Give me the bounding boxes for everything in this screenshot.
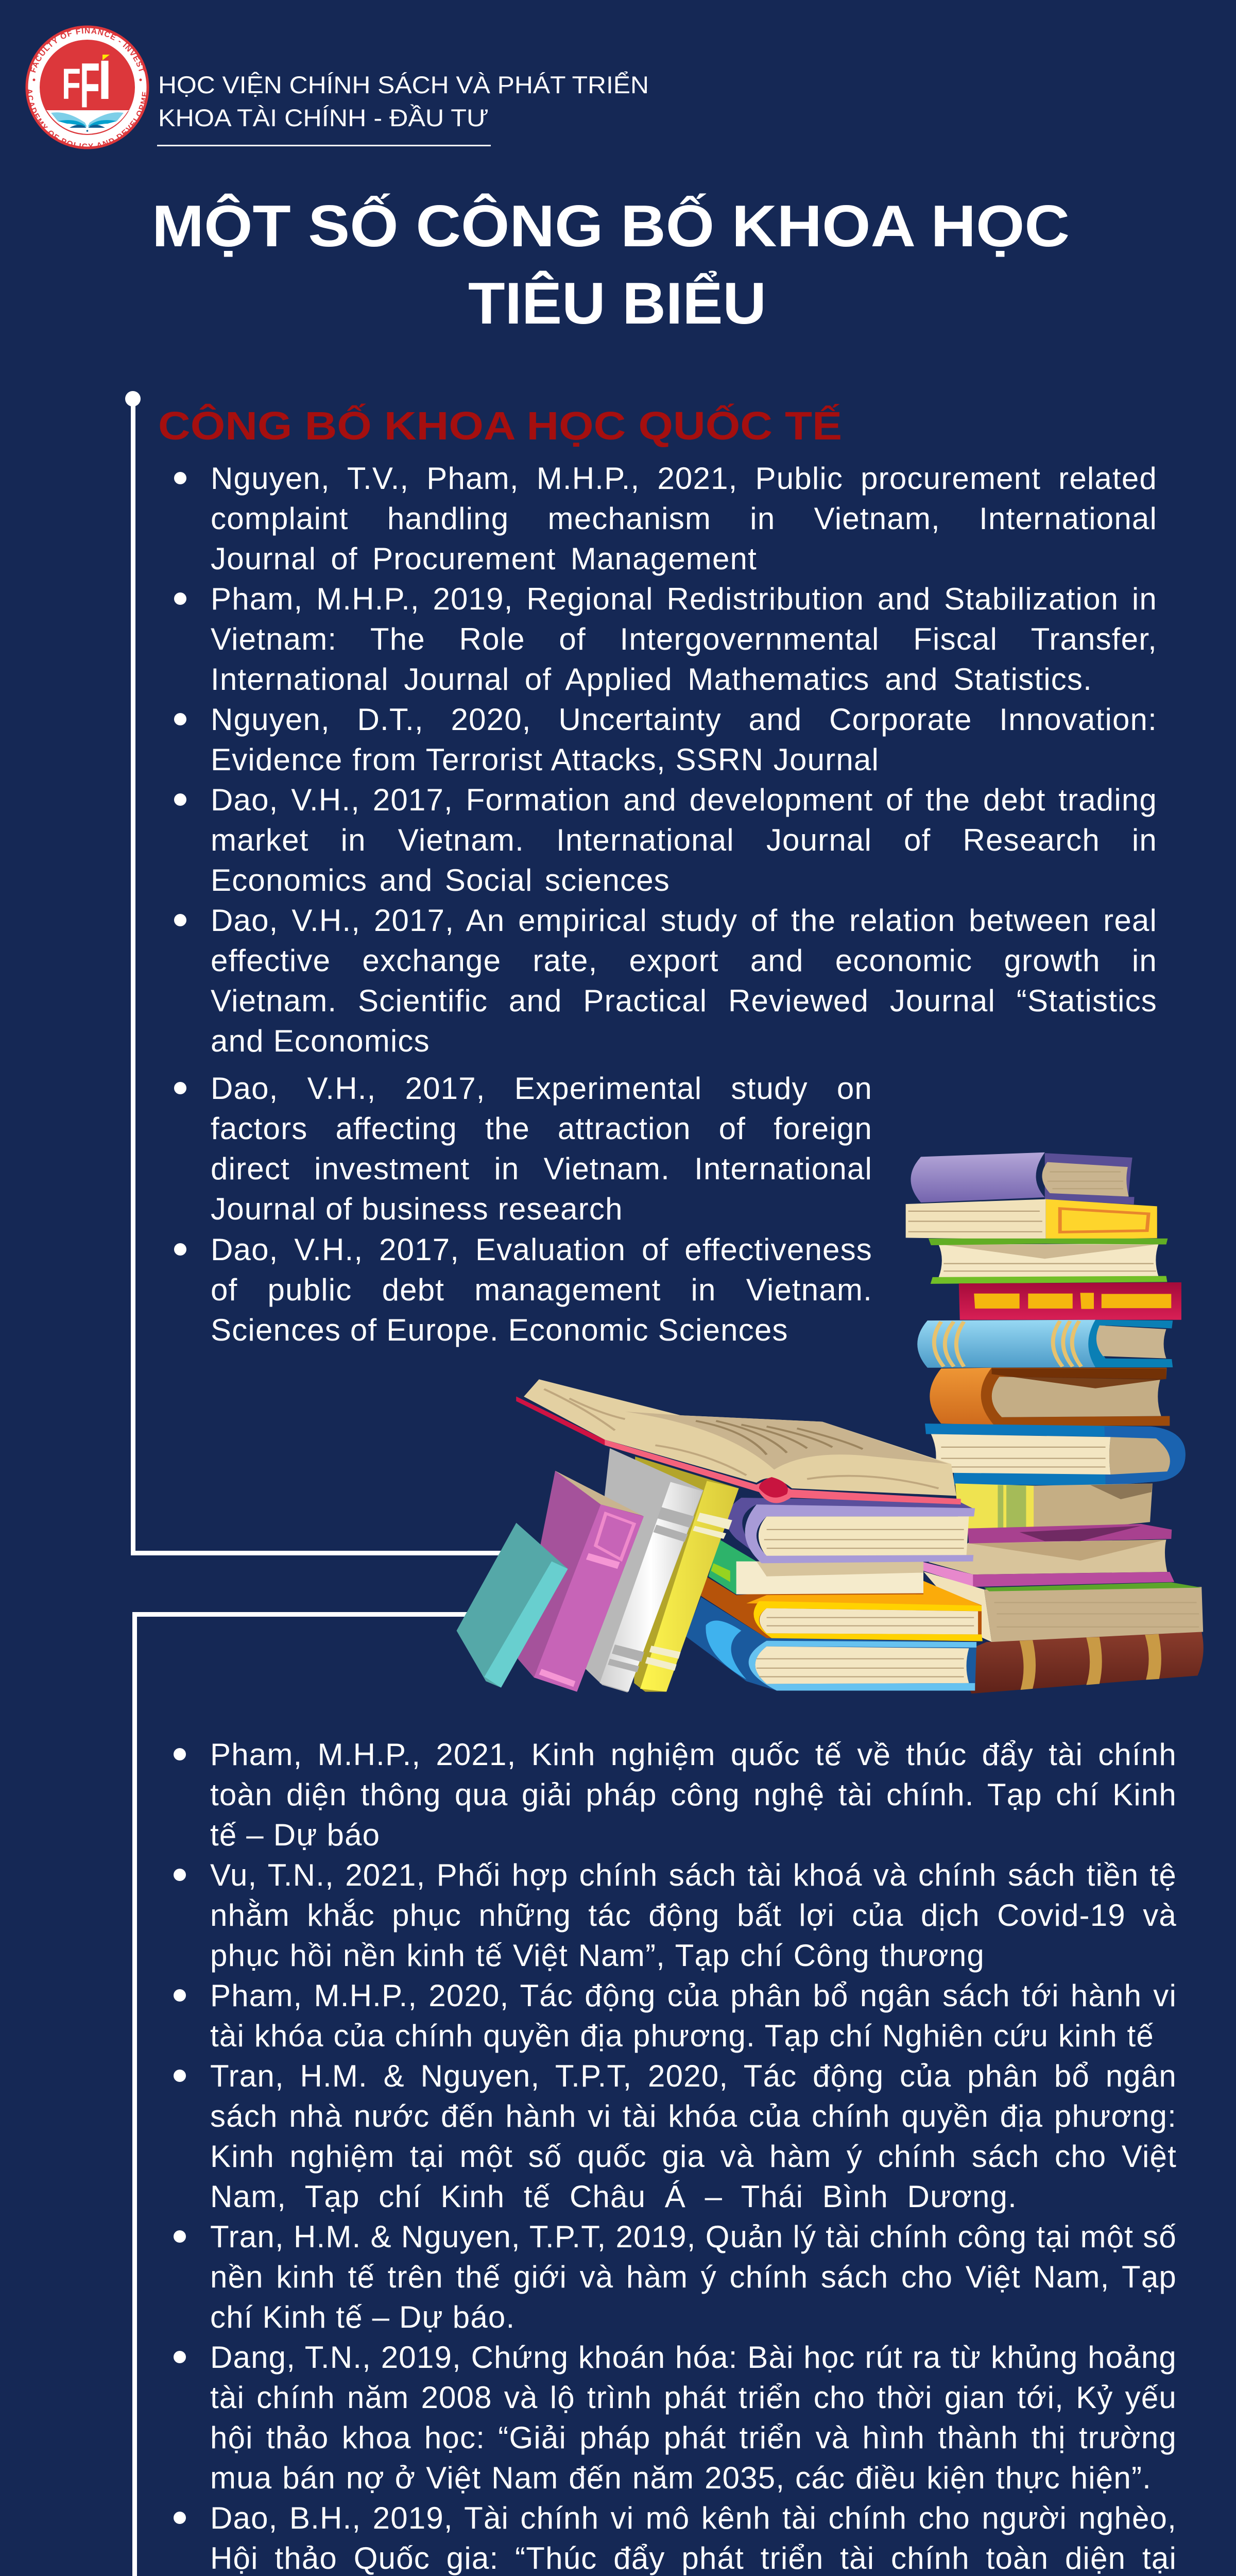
book: orange bbox=[930, 1368, 1170, 1426]
book: green cover bbox=[929, 1239, 1168, 1284]
list: international publications bbox=[174, 461, 1157, 1347]
item: phục hồi nền kinh tế Việt Nam”, Tạp chí Công thương bbox=[210, 1938, 985, 1973]
item bbox=[174, 1858, 1177, 1973]
item: Pham, M.H.P., 2020, Tác động của phân bổ ngân sách tới hành vi bbox=[210, 1978, 1177, 2013]
item bbox=[174, 702, 1157, 777]
item bbox=[174, 2340, 1177, 2495]
item: tài khóa của chính quyền địa phương. Tạp chí Nghiên cứu kinh tế bbox=[210, 2019, 1154, 2053]
item: International Journal of Applied Mathematics and Statistics. bbox=[211, 662, 1092, 697]
item: Nguyen, T.V., Pham, M.H.P., 2021, Public procurement related bbox=[211, 461, 1157, 496]
header: institute name: HỌC VIỆN CHÍNH SÁCH VÀ PHÁT TRIỂN bbox=[158, 71, 649, 98]
item: and Economics bbox=[211, 1024, 430, 1058]
item bbox=[174, 1232, 872, 1347]
item: Journal of Procurement Management bbox=[211, 541, 757, 576]
book: magenta bbox=[923, 1524, 1174, 1587]
item: Nguyen, D.T., 2020, Uncertainty and Corporate Innovation: bbox=[211, 702, 1157, 737]
item: complaint handling mechanism in Vietnam, International bbox=[211, 501, 1157, 536]
title: MỘT SỐ CÔNG BỐ KHOA HỌC bbox=[152, 194, 1070, 259]
book: purple top bbox=[911, 1153, 1135, 1205]
item: factors affecting the attraction of foreign bbox=[211, 1111, 872, 1146]
item: Evidence from Terrorist Attacks, SSRN Journal bbox=[211, 742, 879, 777]
item bbox=[174, 1737, 1177, 1852]
book: cream and yellow bbox=[906, 1199, 1157, 1240]
item bbox=[174, 1071, 872, 1226]
logo: FFI round seal: F bbox=[80, 49, 100, 121]
item: tài chính năm 2008 và lộ trình phát triển cho thời gian tới, Kỷ yếu bbox=[210, 2380, 1177, 2415]
item: Tran, H.M. & Nguyen, T.P.T, 2019, Quản lý tài chính công tại một số bbox=[210, 2219, 1177, 2254]
item: effective exchange rate, export and economic growth in bbox=[211, 943, 1157, 978]
item bbox=[174, 461, 1157, 576]
title: TIÊU BIỂU bbox=[468, 271, 766, 336]
item: hội thảo khoa học: “Giải pháp phát triển và hình thành thị trường bbox=[210, 2420, 1177, 2455]
book: sky blue bbox=[917, 1320, 1173, 1368]
item: Kinh nghiệm tại một số quốc gia và hàm ý chính sách cho Việt bbox=[210, 2139, 1177, 2174]
header: institute name bbox=[157, 71, 649, 146]
item: Dao, B.H., 2019, Tài chính vi mô kênh tài chính cho người nghèo, bbox=[210, 2501, 1177, 2535]
book: brown bottom bbox=[966, 1632, 1204, 1693]
logo: FFI round seal: I bbox=[98, 48, 112, 111]
item: Dao, V.H., 2017, Experimental study on bbox=[211, 1071, 872, 1106]
logo: FFI round seal: F bbox=[62, 60, 81, 108]
book: standing pink bbox=[518, 1471, 644, 1692]
list: domestic publications bbox=[174, 1737, 1177, 2575]
item bbox=[174, 2219, 1177, 2334]
item bbox=[174, 2501, 1177, 2575]
item: Pham, M.H.P., 2021, Kinh nghiệm quốc tế về thúc đẩy tài chính bbox=[210, 1737, 1177, 1772]
item: sách nhà nước đến hành vi tài khóa của chính quyền địa phương: bbox=[210, 2099, 1177, 2133]
book: royal blue bbox=[925, 1423, 1186, 1486]
item: market in Vietnam. International Journal of Research in bbox=[211, 823, 1157, 857]
item bbox=[174, 2059, 1177, 2214]
book: open book bbox=[516, 1379, 961, 1504]
timeline: upper rail bbox=[125, 391, 543, 1555]
item: direct investment in Vietnam. International bbox=[211, 1151, 872, 1186]
logo: FFI round seal: ACADEMY OF POLICY AND DEVELOPMENT bbox=[28, 90, 146, 149]
item: of public debt management in Vietnam. bbox=[211, 1273, 872, 1307]
item: toàn diện thông qua giải pháp công nghệ tài chính. Tạp chí Kinh bbox=[210, 1777, 1177, 1812]
timeline: lower rail bbox=[126, 1612, 544, 2576]
book: large tan pages bbox=[923, 1571, 1203, 1642]
book: lavender lying bbox=[726, 1498, 975, 1563]
book: standing yellow bbox=[634, 1456, 739, 1692]
item bbox=[174, 582, 1157, 697]
item: Nam, Tạp chí Kinh tế Châu Á – Thái Bình Dương. bbox=[210, 2179, 1017, 2214]
book: orange and yellow lying bbox=[701, 1577, 983, 1641]
item: Tran, H.M. & Nguyen, T.P.T, 2020, Tác động của phân bổ ngân bbox=[210, 2059, 1177, 2093]
item: Journal of business research bbox=[211, 1192, 623, 1226]
item: chí Kinh tế – Dự báo. bbox=[210, 2300, 515, 2334]
item: Hội thảo Quốc gia: “Thúc đẩy phát triển tài chính toàn diện tại bbox=[210, 2541, 1177, 2575]
item bbox=[174, 1978, 1177, 2053]
item: Economics and Social sciences bbox=[211, 863, 670, 897]
heading: international publications: CÔNG BỐ KHOA HỌC QUỐC TẾ bbox=[158, 403, 842, 448]
item: Vietnam. Scientific and Practical Reviewed Journal “Statistics bbox=[211, 984, 1157, 1018]
item: Dao, V.H., 2017, Formation and development of the debt trading bbox=[211, 783, 1157, 817]
item: Sciences of Europe. Economic Sciences bbox=[211, 1313, 788, 1347]
book: standing white bbox=[586, 1448, 703, 1692]
item: mua bán nợ ở Việt Nam đến năm 2035, các điều kiện thực hiện”. bbox=[210, 2461, 1152, 2495]
item: nhằm khắc phục những tác động bất lợi của dịch Covid-19 và bbox=[210, 1898, 1177, 1933]
title bbox=[152, 194, 1070, 336]
item: tế – Dự báo bbox=[210, 1818, 380, 1852]
item bbox=[174, 783, 1157, 897]
item: Vietnam: The Role of Intergovernmental Fiscal Transfer, bbox=[211, 622, 1157, 656]
item: Dao, V.H., 2017, An empirical study of the relation between real bbox=[211, 903, 1157, 938]
book: green lying bbox=[709, 1539, 923, 1595]
item: Dang, T.N., 2019, Chứng khoán hóa: Bài học rút ra từ khủng hoảng bbox=[210, 2340, 1177, 2375]
item: Dao, V.H., 2017, Evaluation of effectiveness bbox=[211, 1232, 872, 1267]
logo: FFI round seal bbox=[26, 26, 149, 149]
item bbox=[174, 903, 1157, 1058]
book: red with yellow labels bbox=[959, 1282, 1181, 1320]
book: deep blue lying bbox=[685, 1597, 976, 1690]
item: nền kinh tế trên thế giới và hàm ý chính sách cho Việt Nam, Tạp bbox=[210, 2260, 1177, 2294]
header: institute name: KHOA TÀI CHÍNH - ĐẦU TƯ bbox=[158, 104, 489, 131]
book: standing teal bbox=[457, 1523, 568, 1688]
item: Vu, T.N., 2021, Phối hợp chính sách tài khoá và chính sách tiền tệ bbox=[210, 1858, 1177, 1892]
item: Pham, M.H.P., 2019, Regional Redistribution and Stabilization in bbox=[211, 582, 1157, 616]
book: yellow green bbox=[955, 1483, 1153, 1533]
